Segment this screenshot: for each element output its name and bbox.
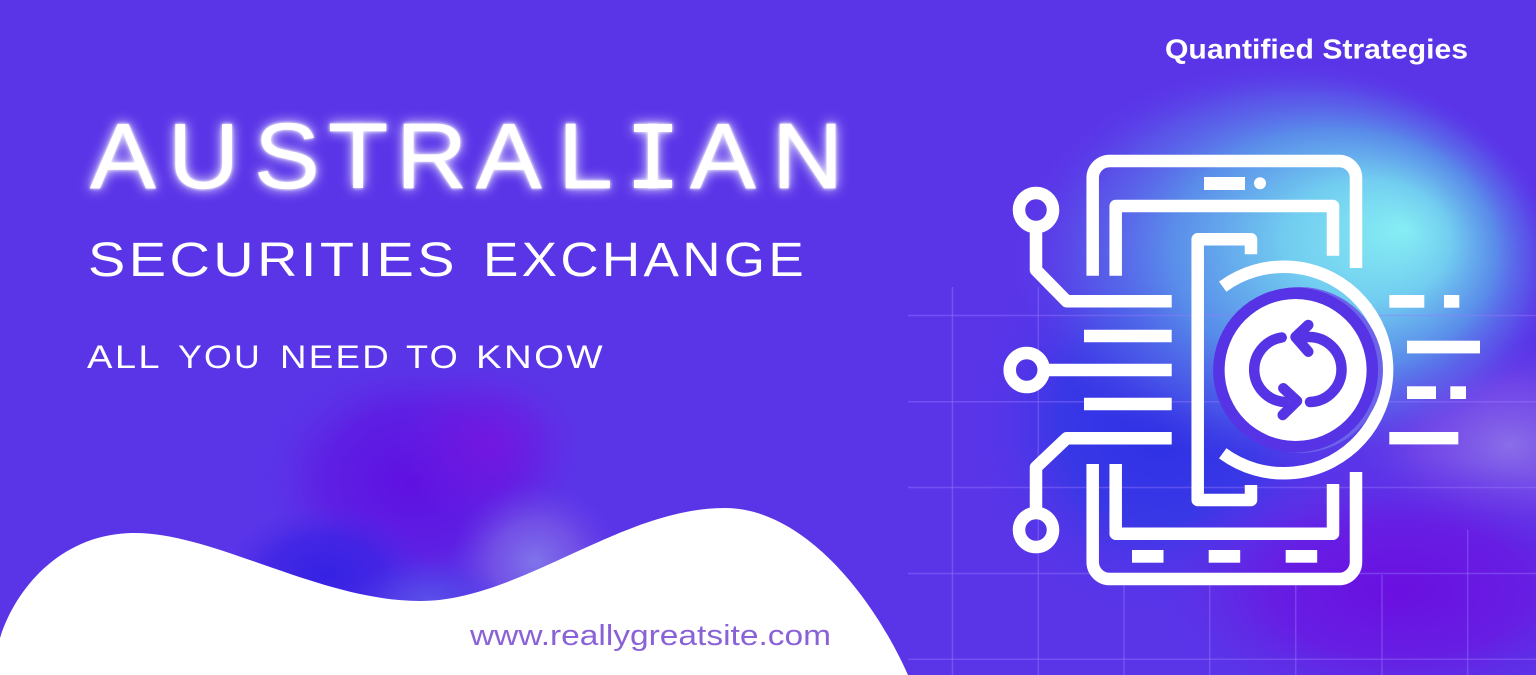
phone outline [1093, 161, 1356, 579]
subtitle: Securities Exchange: SECURITIES [88, 234, 458, 287]
tagline: YOU [178, 339, 262, 375]
white wave [0, 508, 908, 675]
title: Australian: AUSTRALIAN [90, 105, 843, 208]
phone speaker and buttons [1132, 177, 1317, 563]
coin face [1225, 299, 1367, 441]
coin ring [1213, 288, 1378, 452]
subtitle: Securities Exchange [88, 234, 807, 287]
left circuit lines [1010, 193, 1172, 547]
right data dashes [1389, 295, 1480, 444]
subtitle: Securities Exchange: EXCHANGE [483, 234, 807, 287]
background glow: right gradient [960, 63, 1536, 675]
coin crescent [1217, 287, 1383, 453]
tagline: TO [406, 339, 460, 375]
tagline: ALL [87, 339, 162, 375]
tagline [87, 339, 605, 375]
brand name: Quantified Strategies [1165, 34, 1468, 64]
background grid [908, 287, 1536, 675]
tagline: NEED [280, 339, 391, 375]
tagline: KNOW [476, 339, 605, 375]
website url: www.reallygreatsite.com [469, 620, 831, 652]
background glow: left gradient [220, 350, 620, 645]
icon: smartphone sync circuit [1010, 161, 1480, 579]
coin outer arc [1223, 267, 1387, 473]
sync arrows [1254, 325, 1342, 415]
